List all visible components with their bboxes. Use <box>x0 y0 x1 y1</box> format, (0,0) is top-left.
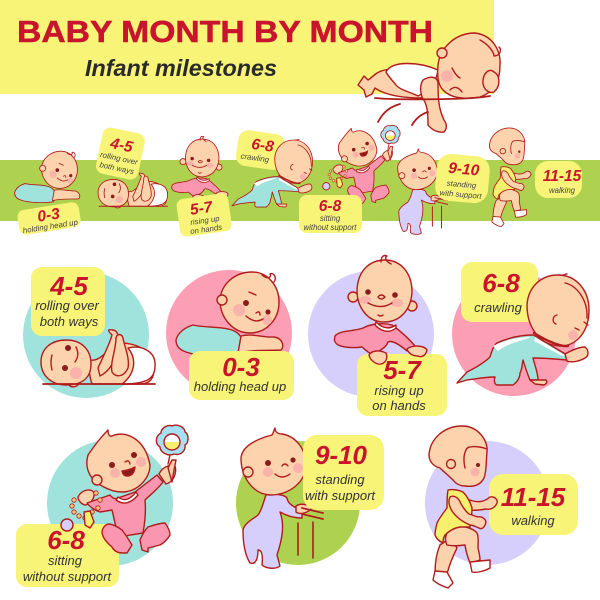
panel: rising up <box>308 256 447 416</box>
panel: sitting: without support <box>23 569 112 584</box>
subtitle: Infant milestones <box>85 55 277 81</box>
panel: rising up: 5-7 <box>383 355 422 385</box>
strip: sitting <box>299 125 400 233</box>
strip: sitting: sitting <box>320 214 341 223</box>
panel: walking: walking <box>511 513 555 528</box>
panel: walking <box>425 426 578 588</box>
strip: rising up: rising up <box>190 214 221 227</box>
strip: standing: with support <box>439 188 483 201</box>
panel: standing: with support <box>305 488 376 503</box>
strip: sitting: 6-8 <box>319 198 342 215</box>
strip: holding head up <box>15 151 82 236</box>
panel: rolling over: both ways <box>40 314 99 329</box>
panel: holding head up <box>166 270 294 400</box>
strip: rolling over <box>94 126 168 208</box>
panel: sitting: sitting <box>48 553 83 568</box>
strip: rising up: on hands <box>190 223 223 236</box>
strip: rising up <box>172 136 233 237</box>
panel: standing <box>236 428 384 568</box>
panel: sitting <box>16 425 188 587</box>
panel: crawling: crawling <box>474 300 523 315</box>
title: BABY MONTH BY MONTH <box>17 15 433 49</box>
panel: holding head up: 0-3 <box>222 352 260 382</box>
panel: sitting: 6-8 <box>47 525 85 555</box>
strip: walking <box>489 128 582 227</box>
strip: crawling <box>232 129 313 207</box>
strip: rolling over: both ways <box>99 160 135 176</box>
illustration: sleeping baby <box>358 33 500 132</box>
strip: walking: walking <box>549 186 576 195</box>
panel: crawling: 6-8 <box>482 268 520 298</box>
panel: timeline strip <box>0 125 600 237</box>
strip: sitting: without support <box>304 223 357 232</box>
panel: rolling over <box>23 267 155 398</box>
strip: walking: 11-15 <box>543 168 582 185</box>
strip: holding head up: holding head up <box>22 218 79 235</box>
strip: holding head up: 0-3 <box>36 205 61 226</box>
panel: standing: 9-10 <box>315 440 368 470</box>
panel: holding head up: holding head up <box>194 379 286 394</box>
strip: standing: standing <box>446 179 477 190</box>
header band <box>0 0 494 94</box>
panel: rising up: on hands <box>372 398 426 413</box>
panel: standing: standing <box>315 472 365 487</box>
strip: standing <box>398 149 491 234</box>
panel: crawling <box>452 262 589 396</box>
strip: rising up: 5-7 <box>189 199 215 219</box>
strip: crawling: 6-8 <box>250 136 275 156</box>
panel: rising up: rising up <box>374 383 424 398</box>
panel: rolling over: 4-5 <box>49 271 88 301</box>
strip: rolling over: rolling over <box>99 150 139 167</box>
strip: standing: 9-10 <box>448 160 480 179</box>
strip: crawling: crawling <box>240 151 270 164</box>
panel: rolling over: rolling over <box>35 298 99 313</box>
panel: walking: 11-15 <box>501 482 566 512</box>
strip: rolling over: 4-5 <box>108 135 135 156</box>
